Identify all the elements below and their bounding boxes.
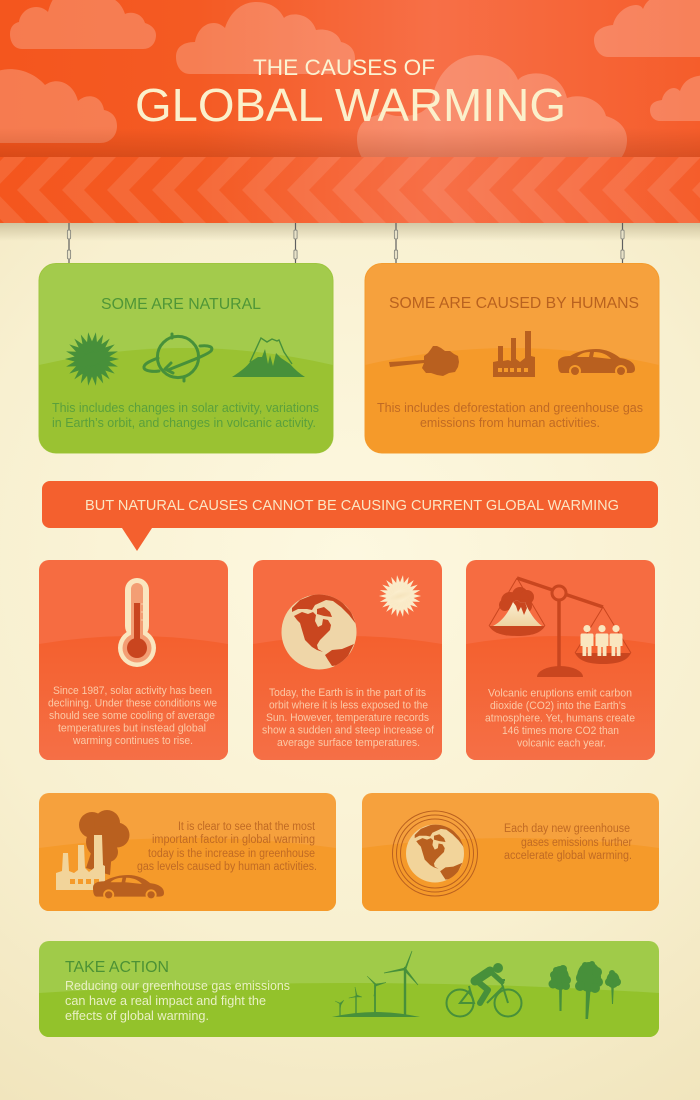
header banner — [0, 0, 700, 223]
body text: take action: can have a real impact and fight the — [65, 994, 266, 1008]
body text: human: This includes deforestation and greenhouse gas — [377, 401, 643, 415]
body text: accelerating: accelerate global warming. — [504, 850, 632, 862]
title line 1: THE CAUSES OF — [253, 55, 435, 80]
icon: fallen tree — [389, 346, 459, 376]
body text: greenhouse: gas levels caused by human activities. — [137, 861, 317, 873]
body text: orbit: Today, the Earth is in the part of its — [269, 687, 426, 699]
panel: earth orbit — [253, 560, 442, 760]
body text: greenhouse: important factor in global warming — [152, 834, 315, 846]
icon: globe with rings — [392, 811, 478, 896]
callout — [42, 481, 658, 551]
cloud: centre large — [357, 55, 627, 165]
icon: thermometer — [118, 578, 156, 667]
body text: human: emissions from human activities. — [420, 416, 600, 430]
body text: CO2: atmosphere. Yet, humans create — [485, 712, 635, 724]
body text: greenhouse — [137, 821, 317, 873]
body text: solar: Since 1987, solar activity has been — [53, 685, 212, 697]
heading: take action: TAKE ACTION — [65, 959, 169, 976]
body text: take action: Reducing our greenhouse gas emissions — [65, 979, 290, 993]
icon: volcano — [232, 338, 305, 377]
body text: orbit: Sun. However, temperature records — [266, 712, 429, 724]
icon: orbit — [144, 334, 212, 381]
body text: natural: This includes changes in solar activity, variations — [52, 401, 319, 415]
body text: solar: should see some cooling of average — [49, 710, 215, 722]
icon: factory — [56, 835, 105, 890]
icon: globe — [282, 594, 356, 670]
title line 2: GLOBAL WARMING — [135, 79, 566, 131]
body text: solar: declining. Under these conditions we — [48, 698, 217, 710]
icon: balance scale — [489, 578, 631, 677]
panel: human greenhouse gases — [39, 793, 336, 911]
cloud: left — [0, 69, 117, 143]
cloud: right — [650, 75, 700, 121]
body text: natural — [52, 401, 319, 430]
body text: greenhouse: It is clear to see that the most — [178, 821, 316, 833]
hanging chains — [67, 223, 624, 264]
cloud: top left — [10, 0, 156, 49]
icon: sun — [378, 574, 422, 618]
tree 3 — [605, 970, 621, 1004]
callout text: BUT NATURAL CAUSES CANNOT BE CAUSING CURRENT GLOBAL WARMING — [85, 498, 619, 514]
panel: volcanic versus human CO2 — [466, 560, 655, 760]
body text: greenhouse: today is the increase in greenhouse — [148, 848, 315, 860]
body text: CO2: Volcanic eruptions emit carbon — [488, 688, 632, 700]
icon: car — [558, 349, 635, 377]
icon: trees — [548, 961, 621, 1019]
body text: CO2 — [485, 688, 635, 750]
cloud: top centre — [176, 2, 355, 74]
icon: sun — [64, 331, 120, 387]
body text: orbit: show a sudden and steep increase of — [262, 724, 435, 736]
heading: some are natural: SOME ARE NATURAL — [101, 296, 261, 313]
tree 1 — [548, 965, 571, 1011]
body text: solar: temperatures but instead global — [58, 722, 206, 734]
body text: take action: effects of global warming. — [65, 1009, 209, 1023]
icon: wind turbines — [332, 951, 420, 1017]
body text: orbit: average surface temperatures. — [277, 737, 420, 749]
icon: factory — [493, 331, 535, 377]
body text: solar — [48, 685, 217, 747]
body text: human — [377, 401, 643, 430]
panel: accelerating emissions — [362, 793, 659, 911]
body text: solar: warming continues to rise. — [72, 735, 193, 747]
body text: accelerating: Each day new greenhouse — [504, 823, 630, 835]
panel: natural causes — [39, 264, 333, 453]
cloud: top right — [594, 0, 700, 57]
chevron band — [0, 157, 700, 223]
heading: some are caused by humans: SOME ARE CAUSED BY HUMANS — [389, 295, 639, 312]
body text: take action — [65, 979, 290, 1023]
clouds — [0, 0, 700, 165]
title — [135, 55, 566, 131]
body text: natural: in Earth’s orbit, and changes in volcanic activity. — [52, 416, 316, 430]
body text: orbit: orbit where it is less exposed to the — [269, 700, 428, 712]
body text: accelerating — [504, 823, 632, 862]
shadow under banner — [0, 223, 700, 241]
icon: cyclist — [446, 963, 522, 1016]
tree 2 — [575, 961, 603, 1019]
icon: car — [93, 875, 164, 900]
body text: orbit — [262, 687, 435, 749]
panel: solar activity — [39, 560, 228, 760]
body text: CO2: dioxide (CO2) into the Earth’s — [490, 700, 626, 712]
body text: CO2: 146 times more CO2 than — [502, 725, 619, 737]
body text: accelerating: gases emissions further — [521, 837, 632, 849]
panel: human causes — [365, 264, 659, 453]
body text: CO2: volcanic each year. — [517, 738, 606, 750]
panel: take action — [39, 941, 659, 1037]
icon: smoke — [79, 810, 130, 875]
